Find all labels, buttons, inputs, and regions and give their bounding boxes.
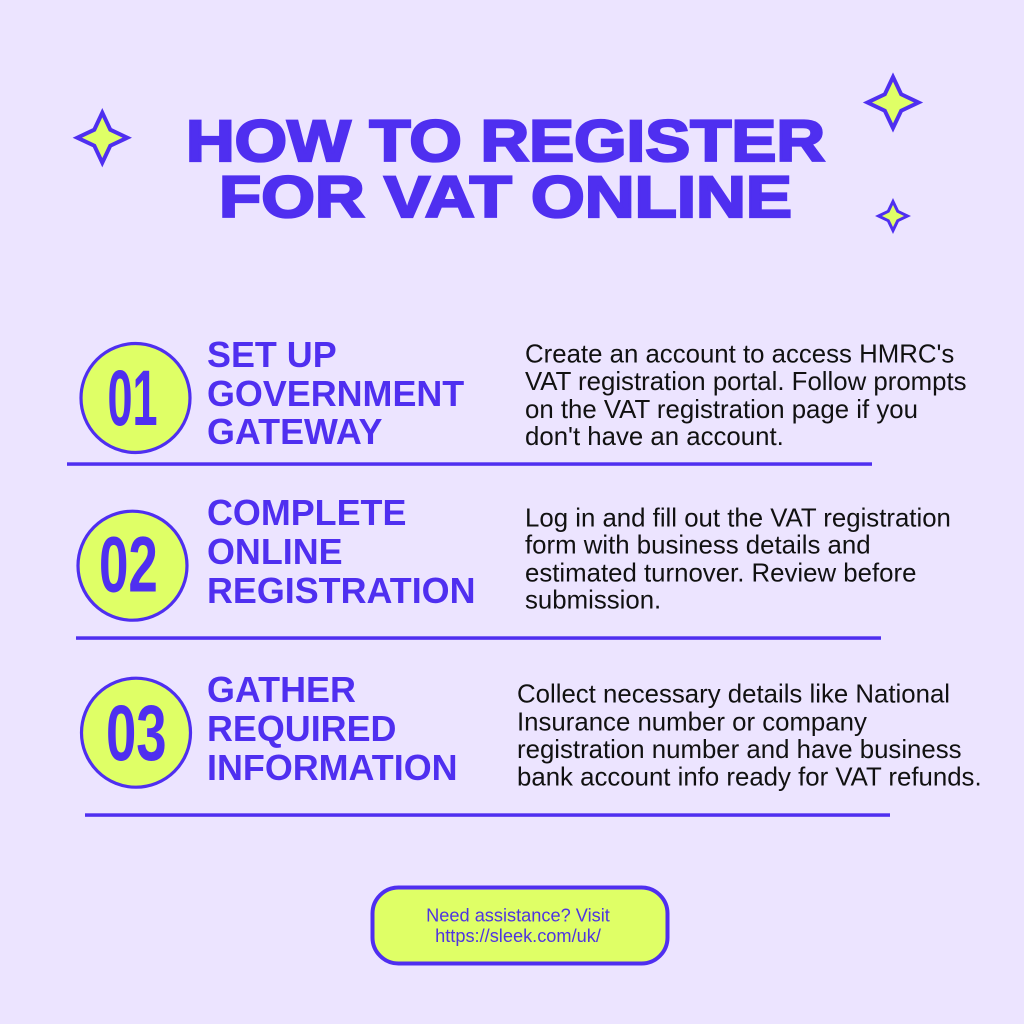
title: HOW TO REGISTER	[186, 109, 825, 174]
heading: complete online registration	[207, 493, 476, 611]
description 2: submission.	[525, 586, 661, 614]
icon: sparkle top right	[868, 77, 918, 128]
number badge 03: 03	[106, 690, 167, 777]
number badge 01	[81, 344, 190, 452]
description 1: on the VAT registration page if you	[525, 396, 918, 424]
heading: set up government gateway	[207, 335, 464, 452]
heading: complete online registration: ONLINE	[207, 532, 343, 572]
icon: sparkle bottom right	[878, 202, 908, 230]
description 3: bank account info ready for VAT refunds.	[517, 764, 982, 792]
description 1: don't have an account.	[525, 423, 784, 451]
number badge 02: 02	[99, 521, 158, 609]
description 1	[525, 340, 967, 451]
callout button	[372, 888, 668, 964]
title: FOR VAT ONLINE	[219, 165, 792, 230]
description 1: Create an account to access HMRC's	[525, 340, 954, 368]
description 3: Insurance number or company	[517, 708, 867, 736]
step 2	[78, 493, 951, 620]
icon: sparkle left	[77, 113, 127, 163]
heading: complete online registration: COMPLETE	[207, 493, 406, 533]
heading: complete online registration: REGISTRATION	[207, 571, 476, 611]
description 2	[525, 504, 951, 614]
heading: set up government gateway: GATEWAY	[207, 412, 383, 452]
heading: set up government gateway: GOVERNMENT	[207, 374, 464, 414]
heading: gather required information: INFORMATION	[207, 748, 458, 788]
step 3	[82, 670, 982, 792]
heading: gather required information	[207, 670, 458, 788]
callout button: Need assistance? Visit	[426, 906, 610, 926]
heading: set up government gateway: SET UP	[207, 335, 337, 375]
description 2: form with business details and	[525, 532, 871, 560]
title	[186, 109, 825, 230]
number badge 02	[78, 511, 187, 620]
callout button: https://sleek.com/uk/	[435, 926, 602, 946]
description 3: Collect necessary details like National	[517, 680, 950, 708]
description 2: estimated turnover. Review before	[525, 560, 916, 588]
heading: gather required information: GATHER	[207, 670, 356, 710]
description 1: VAT registration portal. Follow prompts	[525, 368, 967, 396]
heading: gather required information: REQUIRED	[207, 709, 396, 749]
description 3: registration number and have business	[517, 736, 962, 764]
description 2: Log in and fill out the VAT registration	[525, 504, 951, 532]
description 3	[517, 680, 982, 792]
number badge 01: 01	[108, 354, 158, 442]
step 1	[81, 335, 967, 452]
number badge 03	[82, 678, 190, 787]
